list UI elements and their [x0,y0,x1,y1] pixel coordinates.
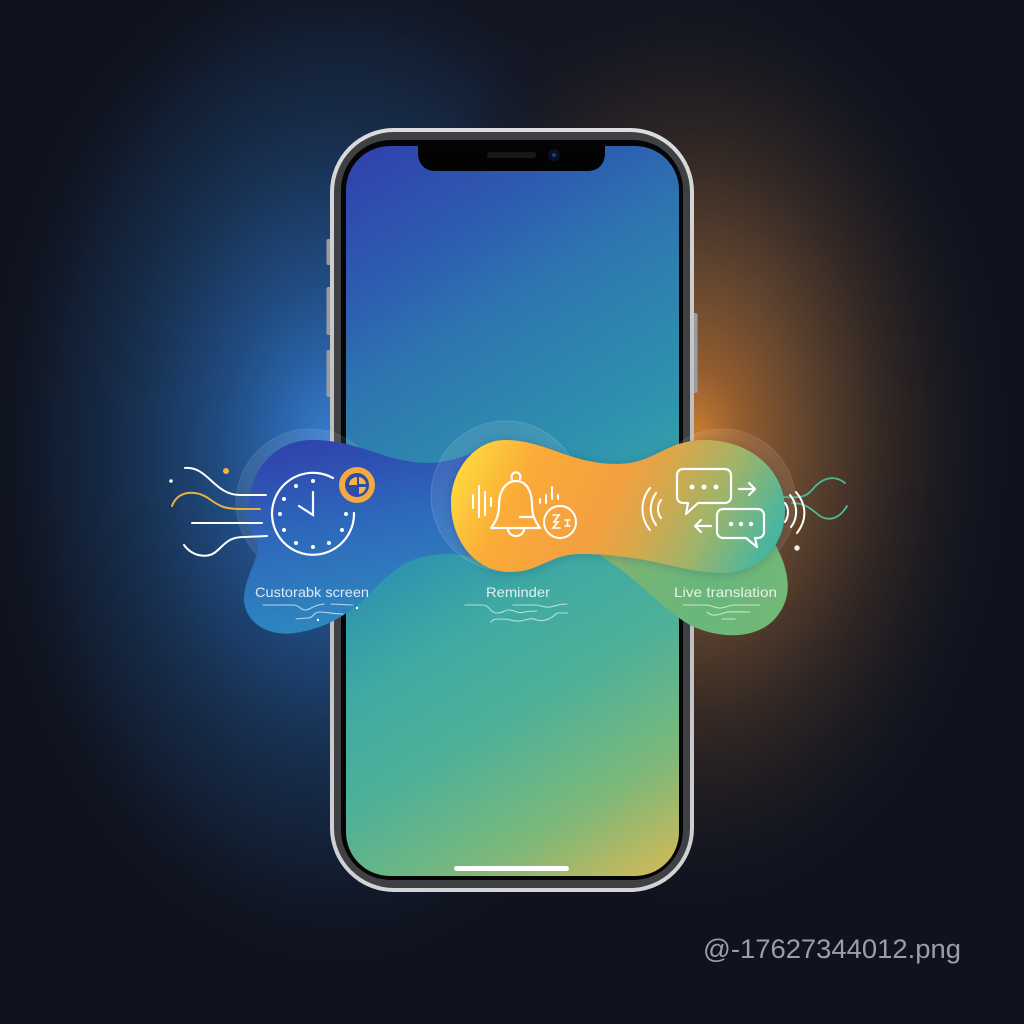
notch [418,146,605,171]
icon: signal waves left [642,488,661,530]
icon: orange badge [339,467,375,503]
icon: speed lines [169,468,267,556]
glass circles: left and right [236,429,796,577]
decoration: squiggles left [263,604,358,621]
steel frame [330,128,694,892]
decoration: squiggles right [683,605,760,619]
decoration: squiggles center [465,604,568,622]
home indicator [454,866,569,871]
icon: bell [491,472,540,536]
black bezel [341,140,683,880]
label: customizable screen: Custorabk screen [255,584,369,600]
speaker [487,152,536,158]
panel: blue blob [244,440,480,634]
side buttons [326,239,698,397]
inner band [334,132,690,888]
icon: clock [272,473,354,555]
icon: chat bubbles [677,469,764,547]
screen [346,146,679,876]
panel: warm blob [451,440,785,573]
icon: sound bars and snooze [473,486,576,538]
icon: signal waves and lines right [784,478,847,551]
label: live translation: Live translation [674,584,777,600]
phone [326,128,698,892]
panel: green lower lobe [600,520,788,635]
watermark: @-17627344012.png [703,934,961,964]
glass circle: center [431,421,581,571]
label: reminder: Reminder [486,584,550,600]
camera [548,149,560,161]
